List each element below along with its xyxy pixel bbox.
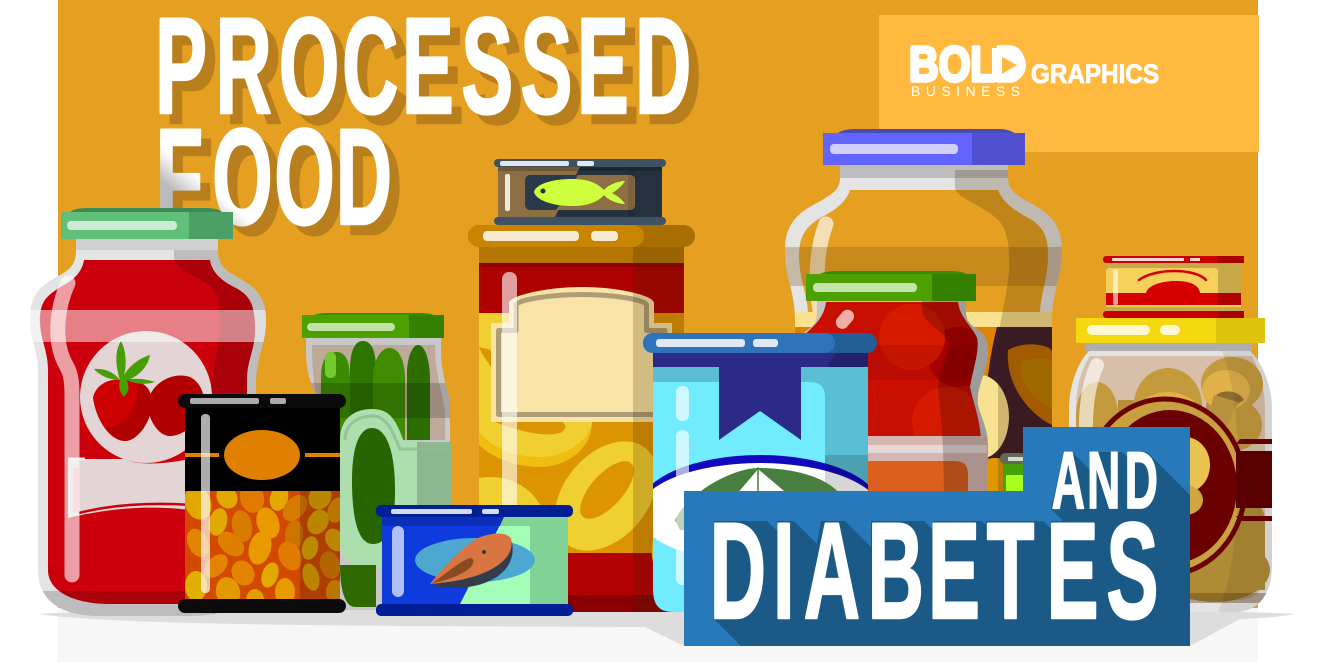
tomato leaves [94, 341, 155, 397]
can oval label [653, 455, 868, 552]
jar: red tomatoes small jar [804, 271, 988, 491]
jar highlight [58, 283, 72, 575]
pickles lid [302, 313, 444, 338]
floor shadow [38, 606, 1295, 646]
jar dark band [780, 247, 1070, 286]
jar highlight [1086, 365, 1097, 500]
purple lid [823, 129, 1025, 165]
logo panel [879, 15, 1259, 152]
onion rings [479, 313, 653, 562]
small green can behind title panel [1000, 453, 1026, 495]
jar shade [922, 301, 990, 500]
title shadow [165, 0, 701, 263]
pale floor [58, 608, 1258, 662]
panel background [684, 427, 1190, 646]
title panel: and diabetes [684, 427, 1190, 647]
title shadow: FOOD [166, 110, 402, 263]
jar contents label and food [795, 312, 1052, 491]
jar label banner [68, 459, 192, 518]
fish icon [534, 179, 625, 206]
corn kernels [185, 491, 340, 599]
can shade [300, 491, 340, 599]
heading word DIABETES: DIABETES [710, 494, 1158, 647]
jar: tall onion-ring jar [468, 225, 695, 612]
title word FOOD: FOOD [156, 100, 392, 253]
tomato jar lid [61, 208, 233, 239]
jar highlight [833, 307, 857, 332]
pickle behind label [352, 428, 395, 544]
cream label [491, 287, 672, 422]
jar: mushrooms [1060, 256, 1280, 612]
title: Processed Food [155, 0, 701, 263]
can highlight [392, 526, 404, 597]
logo word GRAPHICS: GRAPHICS [1031, 59, 1159, 89]
logo play icon [992, 48, 1026, 82]
orange emblem [185, 430, 340, 480]
can: blue lid fish can [638, 333, 882, 612]
tomatoes [93, 341, 204, 441]
jar: large purple-lid jar [785, 129, 1062, 491]
ribbon [719, 367, 801, 440]
mushrooms [1076, 382, 1118, 415]
yellow jar lid [1076, 318, 1265, 343]
heading word AND: AND [1052, 434, 1158, 525]
logo word BUSINESS: BUSINESS [911, 83, 1020, 99]
jar highlight [502, 272, 517, 600]
jar translucent band [28, 310, 268, 342]
green lid [806, 271, 976, 301]
jar shade [633, 247, 684, 612]
blue oval [415, 538, 535, 582]
pickles label and body [340, 409, 451, 568]
can lid [643, 333, 877, 353]
jar label [796, 436, 987, 500]
jar highlight [817, 224, 826, 310]
can lids [178, 394, 346, 613]
jar lid [468, 225, 695, 247]
jar: pickles [300, 313, 460, 610]
tin lids [376, 505, 573, 616]
jar base band [1190, 593, 1266, 603]
can: black corn can [178, 394, 350, 613]
can dark shade [828, 353, 868, 367]
can: fish tin [494, 159, 666, 225]
jar dark shade [174, 250, 270, 620]
jar base band [42, 591, 217, 616]
red tin on top of mushroom jar [1103, 256, 1244, 318]
jar: tomato sauce [28, 208, 270, 620]
can neck [653, 353, 868, 367]
can: salmon tin [376, 505, 573, 616]
logo word BOLD: BOLD [909, 38, 1025, 92]
jar label circle [80, 331, 212, 463]
jar shade [955, 170, 1070, 500]
jar shade [1218, 351, 1275, 612]
title shadow: PROCESSED [165, 0, 701, 152]
mushroom jar label [1104, 396, 1272, 574]
panel long shadow [714, 452, 1190, 646]
can highlight [201, 414, 210, 593]
salmon steak [430, 533, 513, 588]
can highlights [676, 386, 689, 585]
